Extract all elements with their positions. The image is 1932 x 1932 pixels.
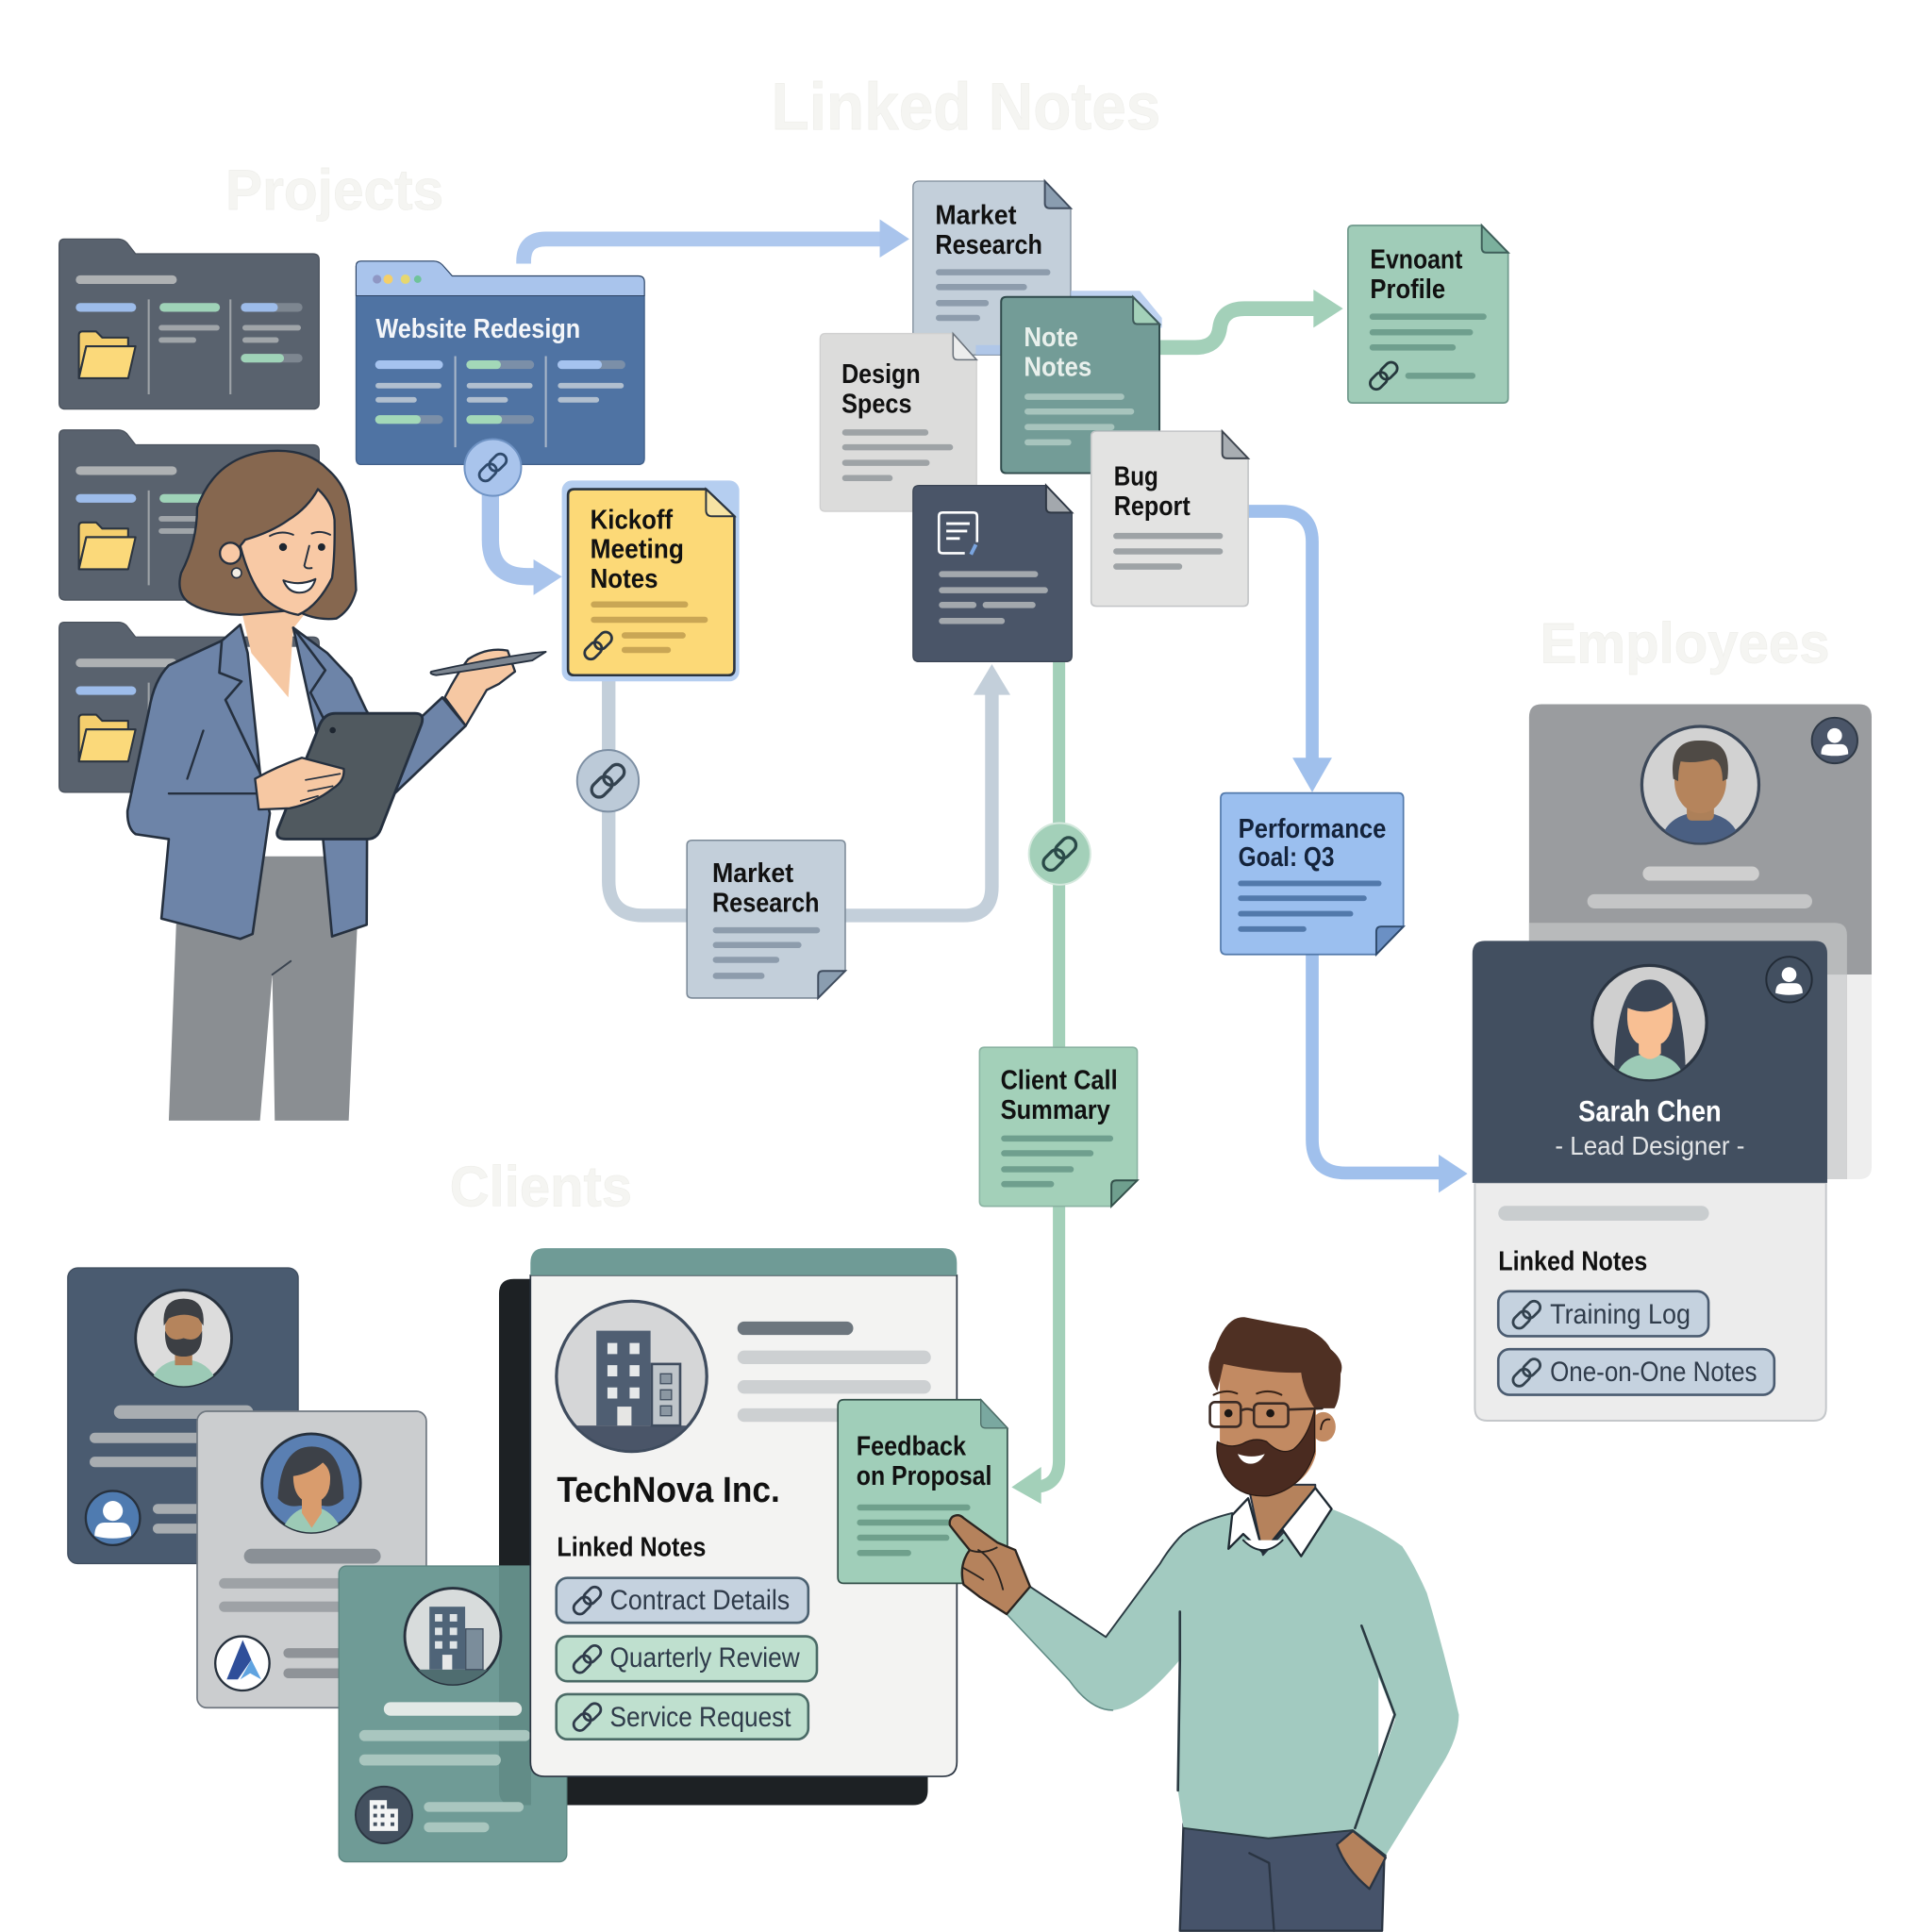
hair [1208,1317,1341,1408]
note: Bug Report: Bug [1114,462,1158,492]
note: Client Call Summary: Client Call [1001,1066,1118,1096]
smile [283,579,315,592]
heading: Employees: Employees [1541,612,1830,675]
name: TechNova Inc.: TechNova Inc. [557,1471,780,1510]
pill: Service Request: Service Request [610,1702,791,1733]
note: Note Notes: Notes [1024,352,1091,382]
project folder card 2 [59,430,319,600]
panel: Website Redesign project [356,261,644,464]
underarm gap [1378,1677,1395,1765]
note: Note Notes: Note [1024,323,1078,353]
icon: building badge [356,1787,412,1843]
role: Lead Designer: - Lead Designer - [1555,1131,1744,1160]
arrow: Kickoff Notes to Market Research [608,677,690,915]
neck [1248,1485,1315,1555]
note: Market Research top: Research [935,230,1042,260]
note: Evnoant Profile [1348,225,1508,403]
project folder card 1 [59,239,319,409]
pill: Contract Details [557,1578,808,1623]
note: Evnoant Profile: Evnoant [1370,245,1463,275]
icon: document with pen [939,512,977,555]
note: Evnoant Profile: Profile [1370,275,1445,305]
panel: client card teal [339,1566,567,1862]
icon: person badge [1766,957,1812,1003]
note: Bug Report: Report [1114,491,1191,522]
sweater folds [1178,1611,1395,1828]
pointing hand [950,1515,1030,1614]
note: Note Notes [1001,297,1159,474]
arrow: dark note to Client Call Summary [1055,659,1064,1050]
arrow: Market Research to dark note [844,664,1010,915]
pill: One-on-One Notes [1498,1349,1774,1395]
icon: link badge green [1029,823,1091,885]
note highlight glow behind Note Notes [975,291,1162,355]
icon: link badge blue [464,440,521,496]
note: Market Research top [913,181,1071,355]
note: Performance Goal Q3: Performance [1239,814,1386,844]
sweater [1007,1508,1458,1856]
icon: person badge [1812,718,1857,763]
panel: Sarah Chen employee card [1473,941,1827,1421]
pill: Training Log: Training Log [1550,1299,1690,1330]
avatar: bearded man [136,1291,232,1390]
man trousers [1180,1824,1385,1931]
jacket [127,625,466,939]
pill: Service Request [557,1694,808,1740]
icon: chain link [582,629,614,661]
illustration: man pointing [950,1317,1458,1931]
shirt [246,647,323,852]
note: Market Research lower: Market [712,858,794,889]
pill: One-on-One Notes: One-on-One Notes [1550,1357,1757,1388]
head [1220,1361,1316,1496]
trousers [169,857,358,1121]
illustration: woman with tablet [127,451,546,1121]
heading: Linked Notes in employee card: Linked Notes [1498,1247,1647,1277]
arrow: Performance Goal to Sarah Chen card [1312,954,1468,1192]
arrow: Website Redesign to Kickoff Meeting Notes [491,491,562,595]
icon: link badge grey-blue [577,750,639,811]
note: Feedback on Proposal: on Proposal [857,1461,991,1491]
note: Design Specs: Design [841,359,921,390]
note: Market Research top: Market [935,201,1017,231]
mouth [1238,1454,1265,1464]
note: Kickoff Meeting Notes: Meeting [591,535,684,565]
note: Feedback on Proposal: Feedback [857,1432,966,1462]
panel: client card dark [68,1268,298,1563]
panel: Website Redesign project: Website Redesign [375,314,580,344]
hair back [179,451,356,619]
eyes [270,532,330,568]
icon: chain link [1368,359,1400,391]
face [241,490,335,615]
neck [242,596,308,697]
glasses and eyes [1210,1391,1322,1426]
avatar: woman [262,1434,360,1541]
note: Bug Report [1091,431,1248,607]
avatar: man [1641,726,1758,850]
project folder card 3 [59,623,319,792]
panel: back employee card [1529,704,1872,1179]
shirt collar [1228,1488,1332,1557]
note: Market Research lower [687,841,845,998]
note: Kickoff Meeting Notes: Notes [591,564,658,594]
note: Performance Goal Q3: Goal: Q3 [1239,842,1335,873]
arrow: Note Notes to Evnoant Profile [1158,290,1343,347]
note: Kickoff Meeting Notes [562,480,740,681]
ear [1311,1412,1336,1441]
arrow: Client Call Summary to Feedback on Proposal [1011,1204,1059,1504]
note: Design Specs [820,334,976,511]
beard [1217,1408,1315,1496]
pill: Quarterly Review: Quarterly Review [610,1642,800,1674]
heading: Clients: Clients [450,1156,632,1219]
panel: client card grey [197,1411,426,1707]
hand with pen [445,650,515,725]
icon: blue person badge [86,1491,140,1545]
note: Client Call Summary: Summary [1001,1095,1110,1125]
back shadow of TechNova card [499,1279,928,1805]
avatar: Sarah Chen [1592,965,1707,1087]
tablet [277,713,423,839]
note: Client Call Summary [979,1047,1138,1207]
arrow: Bug Report to Performance Goal [1247,511,1332,792]
title: Linked Notes: Linked Notes [772,69,1160,143]
heading: Linked Notes in client card: Linked Notes [557,1533,706,1563]
pill: Contract Details: Contract Details [610,1585,790,1616]
note: Feedback on Proposal [838,1400,1008,1583]
heading: Projects: Projects [225,158,443,222]
icon: logo badge [215,1637,270,1690]
hand on tablet [255,758,344,809]
icon: TechNova building [555,1301,715,1456]
note: Performance Goal Q3 [1221,793,1404,955]
note: dark untitled document [913,486,1072,661]
note: Design Specs: Specs [841,390,912,420]
hand in pocket [1337,1831,1386,1889]
note: Market Research lower: Research [712,889,820,919]
name: Sarah Chen: Sarah Chen [1578,1095,1722,1128]
pill: Training Log [1498,1291,1708,1336]
panel: TechNova Inc. client detail [530,1248,957,1776]
ear and earring [220,542,241,564]
arrow: Website Redesign to Market Research [524,219,909,264]
pill: Quarterly Review [557,1637,817,1681]
note: Kickoff Meeting Notes: Kickoff [591,505,674,535]
avatar: building [400,1589,506,1688]
